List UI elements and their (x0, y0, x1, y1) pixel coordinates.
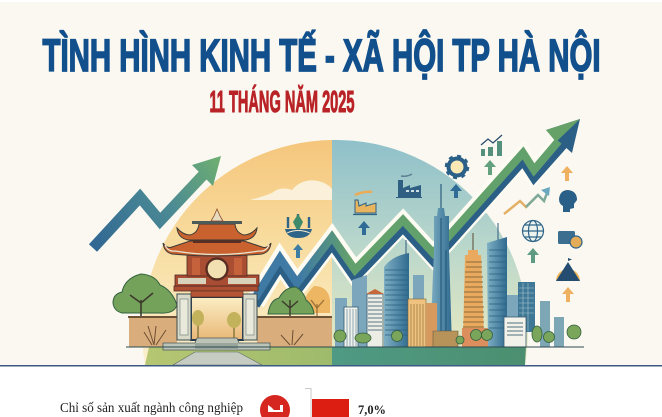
round window (206, 258, 228, 280)
arrow: orange up 1 (561, 166, 573, 181)
bottom rule (0, 365, 662, 366)
centre steps (195, 343, 238, 350)
gold building (408, 299, 437, 347)
pillar panels (180, 299, 254, 335)
upper hall (187, 254, 247, 276)
upper roof (177, 224, 257, 240)
back buildings (335, 275, 564, 347)
white building (344, 307, 358, 347)
ridge (192, 221, 242, 224)
orange tower (463, 233, 484, 337)
upper wall (193, 238, 241, 243)
low podium building (433, 331, 458, 347)
city trees (334, 325, 581, 344)
temple wall right (257, 316, 332, 347)
left rising arrow (93, 156, 221, 248)
balustrade (175, 275, 259, 286)
red roof building (366, 289, 384, 347)
temple wall left (128, 316, 177, 347)
gate steps (163, 338, 270, 350)
arrow: factory up (358, 221, 370, 235)
bushes by wall (144, 326, 303, 345)
stone path (173, 352, 262, 365)
right glass tower (487, 223, 507, 347)
icon: mountain (556, 258, 580, 281)
arrow: gear up (450, 184, 462, 198)
value: 7,0% (358, 402, 386, 417)
roof finial (211, 209, 223, 221)
icon: blue factory (396, 174, 422, 198)
icon: bar chart (481, 135, 502, 156)
illustration: right sky half circle (332, 140, 528, 365)
central rising arrow (255, 119, 580, 305)
indicator label: Chỉ số sản xuất ngành công nghiệp (60, 400, 243, 415)
icon: orange factory (353, 192, 377, 214)
gate lintel (174, 286, 258, 297)
icon: wheat (285, 214, 312, 238)
grid building (518, 282, 535, 332)
spire tower (430, 184, 452, 347)
bar: 7,0% (312, 399, 349, 417)
icon: suitcase (558, 231, 582, 248)
podium orange (462, 328, 488, 347)
chart axis (305, 388, 311, 417)
illustration: left sun half circle (142, 140, 332, 365)
tree right (268, 287, 314, 316)
skyline (334, 184, 581, 347)
lower roof (163, 241, 271, 256)
gate pillars (177, 294, 257, 340)
temple gate (163, 209, 271, 365)
icon: head (559, 190, 577, 212)
small trend arrow (504, 187, 550, 214)
arrow: globe up (527, 248, 539, 263)
ground right (332, 347, 526, 365)
icon: globe (522, 220, 544, 242)
horizon line (126, 346, 584, 348)
cloud (250, 180, 332, 200)
arrow: orange up 2 (562, 287, 574, 302)
arrow: wheat up (293, 244, 303, 258)
curved glass tower (384, 240, 409, 347)
tree left (113, 274, 177, 316)
icon: industry circle (260, 395, 290, 417)
roof white trim (165, 245, 269, 254)
orange tree (303, 286, 330, 316)
white office (504, 317, 526, 347)
trees in opening (192, 310, 241, 338)
arrow: chart up (484, 160, 496, 175)
gate opening (191, 297, 243, 340)
ground left (145, 347, 332, 365)
icon: gear (446, 156, 468, 178)
text: 11 THÁNG NĂM 2025 (210, 84, 354, 119)
